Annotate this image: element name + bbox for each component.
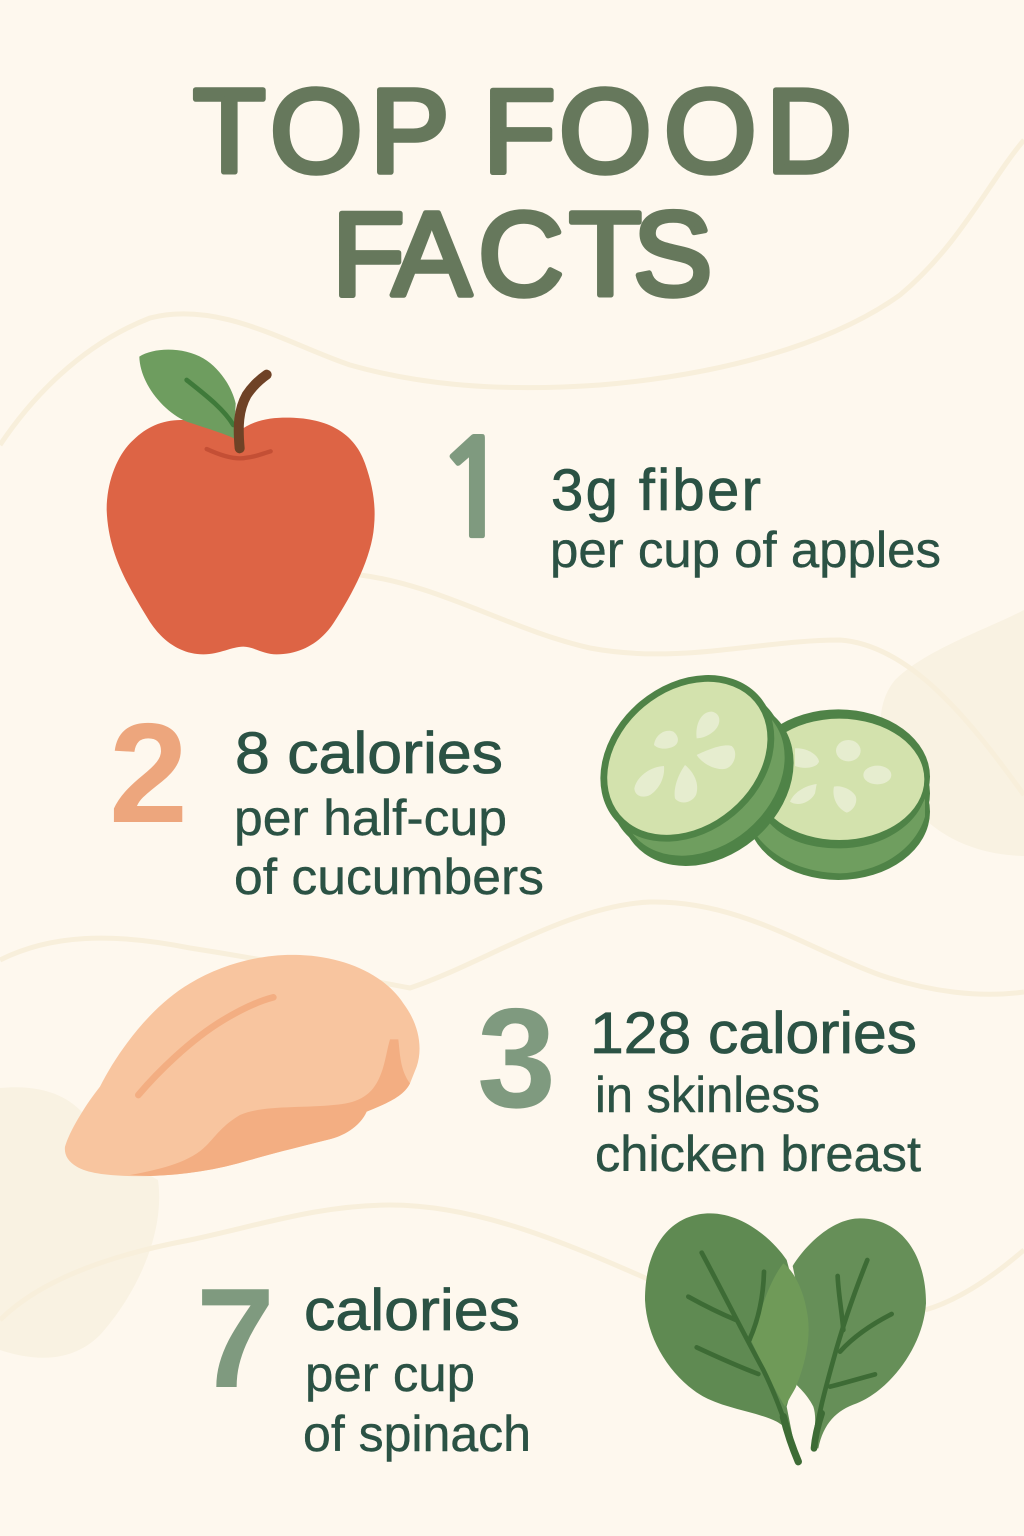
icon: chicken breast <box>65 955 420 1176</box>
fact 3: 128 calories <box>477 979 921 1182</box>
fact 2: 8 calories: of cucumbers <box>234 849 544 905</box>
title: FACTS <box>332 188 712 321</box>
fact 2: 8 calories: per half-cup <box>234 790 507 846</box>
fact 1: 3g fiber: per cup of apples <box>550 522 941 578</box>
title: TOP FOOD <box>193 65 852 198</box>
number 3: 3 <box>477 979 556 1138</box>
title <box>193 65 852 321</box>
fact 1: 3g fiber: 3g fiber <box>551 458 761 523</box>
background blobs and curves <box>0 140 1024 1358</box>
fact 1: 3g fiber <box>433 424 941 578</box>
fact 2: 8 calories <box>109 694 544 905</box>
fact 4: 7 calories: calories <box>304 1278 520 1343</box>
icon: spinach leaves <box>645 1213 926 1462</box>
fact 3: 128 calories: chicken breast <box>595 1126 921 1182</box>
number 1: 1 <box>433 424 515 558</box>
fact 2: 8 calories: 8 calories <box>235 721 503 786</box>
icon: cucumber slices <box>567 641 930 900</box>
fact 4: 7 calories: per cup <box>305 1346 475 1402</box>
fact 4: 7 calories <box>196 1259 531 1462</box>
fact 4: 7 calories: of spinach <box>303 1406 531 1462</box>
number 7: 7 <box>196 1259 275 1418</box>
icon: apple <box>107 350 375 654</box>
fact 3: 128 calories: 128 calories <box>590 1001 917 1066</box>
fact 3: 128 calories: in skinless <box>595 1067 820 1123</box>
number 2: 2 <box>109 694 188 853</box>
